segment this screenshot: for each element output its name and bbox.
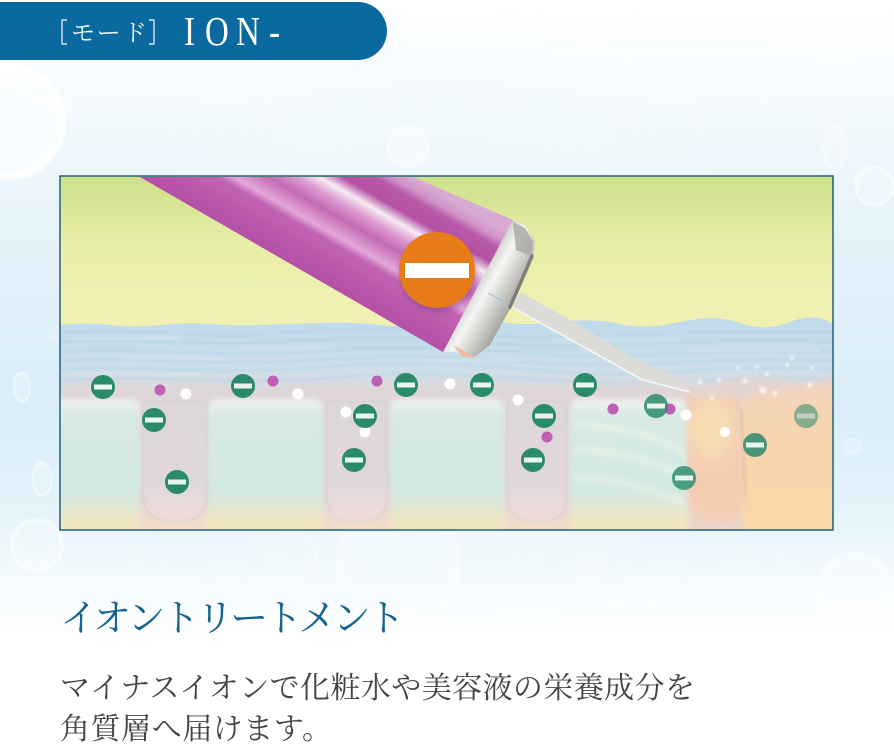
peach treated area (695, 376, 832, 530)
header banner (0, 2, 387, 60)
description text (60, 672, 695, 744)
skin cells (40, 399, 688, 535)
pink transition band (60, 386, 700, 402)
ionic sparkles (698, 356, 814, 400)
epidermis wave layer (60, 318, 832, 385)
negative charge on device (399, 232, 476, 312)
sky background (60, 176, 833, 336)
device body (140, 177, 513, 352)
green negative ions (91, 373, 818, 494)
mode name: ION- (184, 10, 280, 55)
white nutrient particles (180, 378, 730, 438)
purple nutrient particles (154, 376, 676, 442)
description text: マイナスイオンで化粧水や美容液の栄養成分を (60, 672, 695, 705)
panel border (60, 176, 833, 530)
follicle grooves (143, 398, 746, 522)
illustration panel (40, 176, 840, 535)
device head ring (443, 220, 535, 358)
under-skin layer (136, 404, 742, 530)
mode label: モード (71, 21, 147, 47)
treatment probe tip (512, 292, 693, 392)
heading: イオントリートメント (60, 598, 405, 640)
